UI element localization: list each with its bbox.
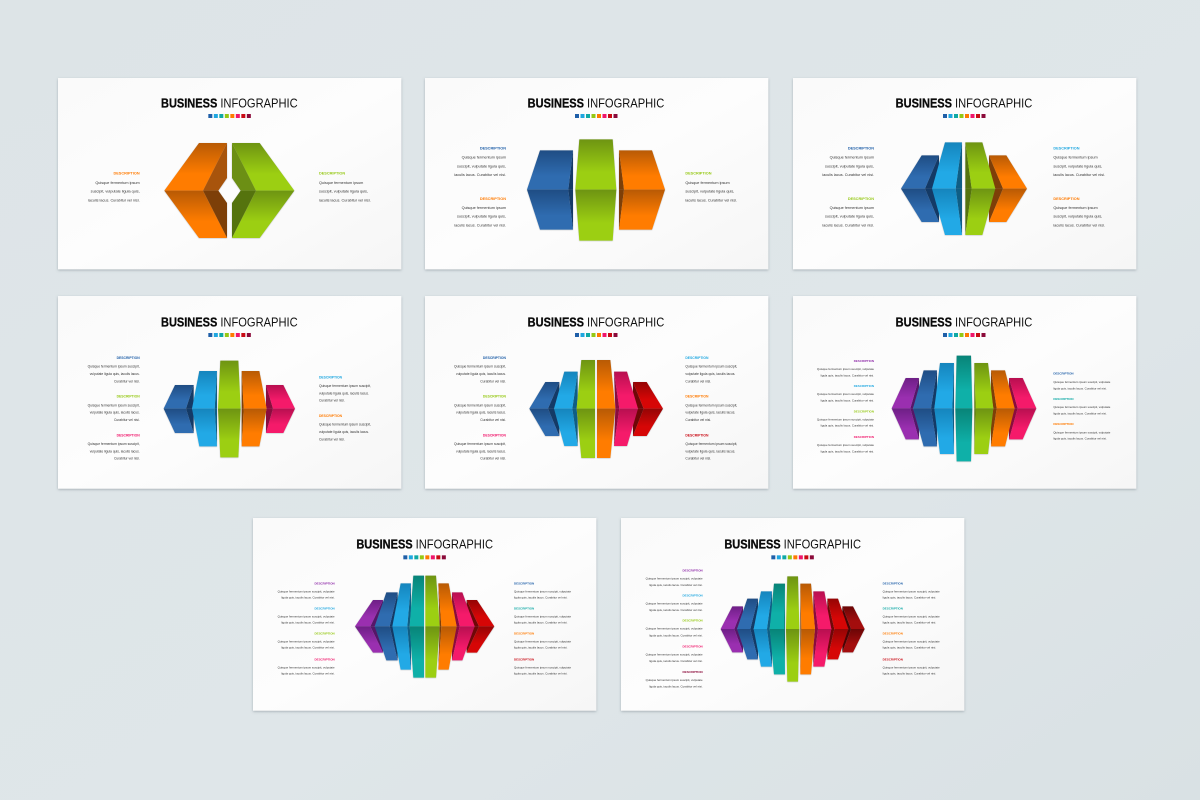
text: left description 2 xyxy=(454,197,506,227)
text: left description 4: Quisque fermentum ipsum suscipit, vulputate xyxy=(646,653,703,657)
text: left description 3: DESCRIPTION xyxy=(314,631,335,635)
text: left description 3: ligula quis, iaculis lacus. Curabitur vel nisi. xyxy=(821,424,874,428)
text: left description 2: Quisque fermentum ipsum suscipit, vulputate xyxy=(646,602,703,606)
text: right description 1: ligula quis, iaculis lacus. Curabitur vel nisi. xyxy=(1053,386,1107,390)
text: left description 1: iaculis lacus. Curabitur vel nisi. xyxy=(822,173,874,177)
text: left description 2: Quisque fermentum ipsum suscipit, xyxy=(454,403,506,407)
colour key squares xyxy=(575,333,617,337)
text: right description 2 xyxy=(514,606,571,625)
text: left description 2: vulputate ligula quis, iaculis lacus. xyxy=(90,411,140,415)
text: left description 2: iaculis lacus. Curabitur vel nisi. xyxy=(822,223,874,227)
title: INFOGRAPHIC xyxy=(220,97,298,111)
text: left description: suscipit, vulputate ligula quis, xyxy=(91,190,140,194)
text: left description 1 xyxy=(278,581,335,600)
text: left description 2 xyxy=(822,197,874,227)
text: left description 4: Quisque fermentum ipsum suscipit, vulputate xyxy=(817,443,874,447)
text: left description 2: DESCRIPTION xyxy=(483,395,507,399)
title: INFOGRAPHIC xyxy=(955,97,1032,111)
text: right description 2 xyxy=(1053,197,1105,227)
text: left description 3: vulputate ligula quis, iaculis lacus. xyxy=(456,449,506,453)
text: left description 3: Quisque fermentum ipsum suscipit, vulputate xyxy=(817,417,874,421)
text: right description 4 xyxy=(883,657,940,676)
text: left description 3: DESCRIPTION xyxy=(117,433,140,437)
text: right description 3: DESCRIPTION xyxy=(514,631,534,635)
text: left description 1: ligula quis, iaculis lacus. Curabitur vel nisi. xyxy=(821,373,874,377)
text: left description 4: Quisque fermentum ipsum suscipit, vulputate xyxy=(278,665,335,669)
title xyxy=(356,538,493,552)
text: right description: iaculis lacus. Curabitur vel nisi. xyxy=(319,198,371,202)
text: right description 3: ligula quis, iaculis lacus. Curabitur vel nisi. xyxy=(1053,436,1107,440)
text: right description: DESCRIPTION xyxy=(319,172,345,176)
text: right description 4: Quisque fermentum ipsum suscipit, vulputate xyxy=(514,665,571,669)
diagram: seven bars xyxy=(892,356,1036,461)
text: right description 1: Quisque fermentum ipsum suscipit, vulputate xyxy=(1053,380,1111,384)
text: right description 1 xyxy=(514,581,571,600)
text: right description 2: DESCRIPTION xyxy=(319,414,343,418)
text: left description 1: Quisque fermentum ipsum xyxy=(462,156,506,160)
text: right description 2: ligula quis, iaculis lacus. Curabitur vel nisi. xyxy=(883,621,936,625)
text: left description 3: DESCRIPTION xyxy=(682,619,703,623)
text: left description 4 xyxy=(817,435,874,453)
panel: seven-part infographic xyxy=(793,296,1136,489)
diagram: two folded chevrons xyxy=(164,143,294,238)
text: right description 1: DESCRIPTION xyxy=(883,581,903,585)
text: right description: Quisque fermentum ipsum xyxy=(319,181,363,185)
text: left description 2: suscipit, vulputate ligula quis, xyxy=(825,215,874,219)
text: left description 2: iaculis lacus. Curabitur vel nisi. xyxy=(454,223,506,227)
text: right description 1: DESCRIPTION xyxy=(1053,372,1074,376)
text: right description 1: DESCRIPTION xyxy=(685,356,709,360)
panel: eight-part infographic xyxy=(253,518,596,711)
text: left description 3: Curabitur vel nisi. xyxy=(114,457,140,461)
text: left description 1 xyxy=(822,147,874,177)
text: left description 3: vulputate ligula quis, iaculis lacus. xyxy=(90,449,140,453)
text: right description 1: Curabitur vel nisi. xyxy=(685,379,711,383)
text: left description 1 xyxy=(454,147,506,177)
panel: five-part infographic xyxy=(58,296,401,489)
text: left description 1: Quisque fermentum ipsum suscipit, xyxy=(454,365,506,369)
panel: three-part infographic xyxy=(425,78,768,269)
text: left description 1: Quisque fermentum ipsum suscipit, vulputate xyxy=(646,577,703,581)
text: right description 1: DESCRIPTION xyxy=(319,375,343,379)
text: right description: suscipit, vulputate ligula quis, xyxy=(685,190,734,194)
text: left description 3: ligula quis, iaculis lacus. Curabitur vel nisi. xyxy=(649,633,703,637)
text: left description 1: suscipit, vulputate ligula quis, xyxy=(825,164,874,168)
text: right description 1: ligula quis, iaculis lacus. Curabitur vel nisi. xyxy=(883,596,936,600)
diagram: eight bars xyxy=(355,576,494,678)
text: right description 1: Quisque fermentum ipsum suscipit, vulputate xyxy=(883,589,940,593)
text: left description 2: ligula quis, iaculis lacus. Curabitur vel nisi. xyxy=(649,608,703,612)
text: right description 2: Curabitur vel nisi. xyxy=(319,437,345,441)
text: right description 1: vulputate ligula quis, iaculis lacus. xyxy=(685,372,735,376)
text: left description 1: DESCRIPTION xyxy=(480,147,506,151)
text: right description 3: DESCRIPTION xyxy=(1053,422,1074,426)
panel: six-part infographic xyxy=(425,296,768,489)
text: left description 2: Curabitur vel nisi. xyxy=(114,418,140,422)
title: INFOGRAPHIC xyxy=(784,538,861,552)
text: left description 2: vulputate ligula quis, iaculis lacus. xyxy=(456,411,506,415)
text: left description 4: ligula quis, iaculis lacus. Curabitur vel nisi. xyxy=(649,659,703,663)
text: left description 2 xyxy=(817,384,874,402)
text: right description 3 xyxy=(685,433,737,461)
text: left description 2: Curabitur vel nisi. xyxy=(480,418,506,422)
text: right description 2: Quisque fermentum ipsum xyxy=(1053,206,1098,210)
text: left description 3: Curabitur vel nisi. xyxy=(480,457,506,461)
text: left description 3 xyxy=(817,409,874,428)
text: left description 2: DESCRIPTION xyxy=(854,384,874,388)
panel: nine-part infographic xyxy=(621,518,964,711)
text: left description 1 xyxy=(646,569,703,587)
text: left description 2: ligula quis, iaculis lacus. Curabitur vel nisi. xyxy=(281,621,335,625)
panel: four-part infographic xyxy=(793,78,1136,269)
text: left description 5: Quisque fermentum ipsum suscipit, vulputate xyxy=(646,678,703,682)
text: right description 1: iaculis lacus. Curabitur vel nisi. xyxy=(1053,173,1105,177)
text: right description 1: Curabitur vel nisi. xyxy=(319,399,345,403)
diagram: four bars xyxy=(901,142,1027,235)
text: right description 3 xyxy=(1053,422,1111,440)
text: left description 1: DESCRIPTION xyxy=(848,147,874,151)
text: right description 1: Quisque fermentum ipsum suscipit, vulputate xyxy=(514,589,571,593)
text: left description 1: vulputate ligula quis, iaculis lacus. xyxy=(90,372,140,376)
title: BUSINESS xyxy=(161,316,217,330)
text: right description 3: Quisque fermentum ipsum suscipit, vulputate xyxy=(883,639,940,643)
text: left description 3: Quisque fermentum ipsum suscipit, xyxy=(454,442,506,446)
text: left description 4: DESCRIPTION xyxy=(854,435,874,439)
text: left description 2: ligula quis, iaculis lacus. Curabitur vel nisi. xyxy=(821,398,874,402)
colour key squares xyxy=(208,114,251,118)
diagram: five bars xyxy=(164,361,295,457)
text: right description 2: Quisque fermentum ipsum suscipit, vulputate xyxy=(514,614,571,618)
text: left description 1: Quisque fermentum ipsum suscipit, xyxy=(88,365,140,369)
text: left description 1: Curabitur vel nisi. xyxy=(480,379,506,383)
text: left description 3 xyxy=(646,619,703,637)
title: INFOGRAPHIC xyxy=(587,316,664,330)
text: left description 2 xyxy=(646,594,703,612)
title: BUSINESS xyxy=(528,316,584,330)
text: right description 2: vulputate ligula quis, iaculis lacus. xyxy=(319,430,369,434)
text: left description 1: Curabitur vel nisi. xyxy=(114,379,140,383)
text: right description 4: Quisque fermentum ipsum suscipit, vulputate xyxy=(883,665,940,669)
text: right description 2: Quisque fermentum ipsum suscipit, vulputate xyxy=(1053,405,1111,409)
title: BUSINESS xyxy=(896,97,952,111)
text: left description 4: ligula quis, iaculis lacus. Curabitur vel nisi. xyxy=(821,449,874,453)
text: right description 2: DESCRIPTION xyxy=(883,606,903,610)
text: right description 1 xyxy=(1053,372,1111,390)
colour key squares xyxy=(403,555,446,559)
text: right description 2: DESCRIPTION xyxy=(514,606,534,610)
text: left description 2 xyxy=(454,395,507,422)
text: left description 2: suscipit, vulputate ligula quis, xyxy=(457,215,506,219)
title: BUSINESS xyxy=(896,316,952,330)
text: left description xyxy=(88,172,140,202)
title xyxy=(161,97,298,111)
title xyxy=(896,316,1032,330)
text: left description 1: DESCRIPTION xyxy=(314,581,335,585)
text: left description 1: DESCRIPTION xyxy=(682,569,703,573)
text: right description 1: Quisque fermentum ipsum xyxy=(1053,156,1098,160)
text: right description 4: ligula quis, iaculis lacus. Curabitur vel nisi. xyxy=(514,672,568,676)
text: right description 2: Quisque fermentum ipsum suscipit, xyxy=(319,423,371,427)
colour key squares xyxy=(208,333,251,337)
text: left description 4: DESCRIPTION xyxy=(314,657,335,661)
text: right description 4: DESCRIPTION xyxy=(514,657,534,661)
text: right description 2: Quisque fermentum ipsum suscipit, vulputate xyxy=(883,614,940,618)
colour key squares xyxy=(575,114,617,118)
text: left description 2: Quisque fermentum ipsum suscipit, vulputate xyxy=(278,614,335,618)
colour key squares xyxy=(771,555,814,559)
text: left description 1 xyxy=(88,356,140,383)
text: right description 1 xyxy=(685,356,737,383)
text: left description 5 xyxy=(646,670,703,688)
colour key squares xyxy=(943,114,985,118)
text: left description 1: Quisque fermentum ipsum suscipit, vulputate xyxy=(817,367,874,371)
text: right description 1: vulputate ligula quis, iaculis lacus. xyxy=(319,391,369,395)
text: right description 1: suscipit, vulputate ligula quis, xyxy=(1053,164,1102,168)
title: BUSINESS xyxy=(356,538,413,552)
title: INFOGRAPHIC xyxy=(587,97,664,111)
text: left description 2 xyxy=(88,395,140,422)
text: right description 2 xyxy=(883,606,940,625)
text: right description xyxy=(319,172,371,202)
text: right description 2: suscipit, vulputate ligula quis, xyxy=(1053,215,1102,219)
text: right description 2 xyxy=(1053,397,1111,415)
text: left description 1: suscipit, vulputate ligula quis, xyxy=(457,164,506,168)
text: left description: iaculis lacus. Curabitur vel nisi. xyxy=(88,198,140,202)
text: left description 4 xyxy=(646,645,703,663)
text: right description 3: Quisque fermentum ipsum suscipit, vulputate xyxy=(1053,430,1111,434)
text: left description 1: ligula quis, iaculis lacus. Curabitur vel nisi. xyxy=(649,583,703,587)
text: right description 2: iaculis lacus. Curabitur vel nisi. xyxy=(1053,223,1105,227)
text: left description 3 xyxy=(454,433,507,461)
text: left description 3: Quisque fermentum ipsum suscipit, vulputate xyxy=(646,627,703,631)
text: right description 3 xyxy=(514,631,571,650)
text: right description 4 xyxy=(514,657,571,676)
text: left description 1: Quisque fermentum ipsum xyxy=(830,156,874,160)
text: right description 1: DESCRIPTION xyxy=(514,581,534,585)
text: left description 1: DESCRIPTION xyxy=(483,356,507,360)
text: left description 2: DESCRIPTION xyxy=(682,594,703,598)
title: BUSINESS xyxy=(528,97,584,111)
text: left description 2: Quisque fermentum ipsum suscipit, vulputate xyxy=(817,392,874,396)
text: right description 2 xyxy=(685,395,737,422)
text: right description 3: ligula quis, iaculis lacus. Curabitur vel nisi. xyxy=(514,646,568,650)
text: right description 2: DESCRIPTION xyxy=(1053,197,1080,201)
diagram: six bars xyxy=(529,360,663,458)
text: right description 3: DESCRIPTION xyxy=(883,631,903,635)
text: left description 2: DESCRIPTION xyxy=(848,197,874,201)
title: INFOGRAPHIC xyxy=(955,316,1032,330)
text: left description 1: ligula quis, iaculis lacus. Curabitur vel nisi. xyxy=(281,596,335,600)
text: right description 1 xyxy=(1053,147,1105,177)
text: left description 1: Quisque fermentum ipsum suscipit, vulputate xyxy=(278,589,335,593)
text: right description 4: ligula quis, iaculis lacus. Curabitur vel nisi. xyxy=(883,672,936,676)
text: left description 3 xyxy=(88,433,140,461)
title xyxy=(528,97,664,111)
title xyxy=(528,316,664,330)
title xyxy=(161,316,298,330)
text: left description 2: Quisque fermentum ipsum xyxy=(830,206,874,210)
text: right description: suscipit, vulputate ligula quis, xyxy=(319,190,368,194)
text: right description: DESCRIPTION xyxy=(685,172,712,176)
text: right description 3 xyxy=(883,631,940,650)
text: left description 5: ligula quis, iaculis lacus. Curabitur vel nisi. xyxy=(649,684,703,688)
title: BUSINESS xyxy=(724,538,781,552)
text: right description 1 xyxy=(319,375,371,403)
text: right description 1 xyxy=(883,581,940,600)
title: INFOGRAPHIC xyxy=(416,538,493,552)
text: right description: Quisque fermentum ipsum xyxy=(685,181,730,185)
title: INFOGRAPHIC xyxy=(220,316,298,330)
text: right description 3: DESCRIPTION xyxy=(685,433,709,437)
text: left description 1: DESCRIPTION xyxy=(854,359,874,363)
text: right description 1: ligula quis, iaculis lacus. Curabitur vel nisi. xyxy=(514,596,568,600)
text: right description: iaculis lacus. Curabitur vel nisi. xyxy=(685,198,737,202)
text: right description 2: Curabitur vel nisi. xyxy=(685,418,711,422)
text: right description 1: Quisque fermentum ipsum suscipit, xyxy=(685,365,737,369)
text: left description 3: DESCRIPTION xyxy=(483,433,507,437)
text: right description 2: DESCRIPTION xyxy=(1053,397,1074,401)
colour key squares xyxy=(943,333,985,337)
text: right description 3: Curabitur vel nisi. xyxy=(685,457,711,461)
text: left description 3: Quisque fermentum ipsum suscipit, vulputate xyxy=(278,639,335,643)
text: right description 2: ligula quis, iaculis lacus. Curabitur vel nisi. xyxy=(1053,411,1107,415)
text: left description 3: DESCRIPTION xyxy=(854,409,874,413)
text: left description 4 xyxy=(278,657,335,676)
text: left description 1: vulputate ligula quis, iaculis lacus. xyxy=(456,372,506,376)
text: left description 1 xyxy=(454,356,507,383)
text: left description 4: DESCRIPTION xyxy=(682,645,703,649)
text: left description 2: DESCRIPTION xyxy=(314,606,335,610)
text: left description 4: ligula quis, iaculis lacus. Curabitur vel nisi. xyxy=(281,672,335,676)
text: right description 3: Quisque fermentum ipsum suscipit, xyxy=(685,442,737,446)
text: right description 3: vulputate ligula quis, iaculis lacus. xyxy=(685,449,735,453)
diagram: three bars xyxy=(527,139,665,241)
text: right description xyxy=(685,172,737,202)
text: left description 1: iaculis lacus. Curabitur vel nisi. xyxy=(454,173,506,177)
text: left description 3: ligula quis, iaculis lacus. Curabitur vel nisi. xyxy=(281,646,335,650)
text: left description: DESCRIPTION xyxy=(113,172,140,176)
text: right description 2: Quisque fermentum ipsum suscipit, xyxy=(685,403,737,407)
text: left description 2: DESCRIPTION xyxy=(117,395,140,399)
text: right description 2 xyxy=(319,414,371,441)
text: left description 2: Quisque fermentum ipsum xyxy=(462,206,506,210)
text: left description 3 xyxy=(278,631,335,650)
text: left description: Quisque fermentum ipsum xyxy=(95,181,140,185)
text: left description 1 xyxy=(817,359,874,377)
text: right description 2: ligula quis, iaculis lacus. Curabitur vel nisi. xyxy=(514,621,568,625)
title xyxy=(896,97,1032,111)
text: right description 2: DESCRIPTION xyxy=(685,395,709,399)
text: left description 3: Quisque fermentum ipsum suscipit, xyxy=(88,442,140,446)
text: left description 1: DESCRIPTION xyxy=(117,356,140,360)
text: left description 2 xyxy=(278,606,335,625)
text: right description 1: DESCRIPTION xyxy=(1053,147,1080,151)
text: right description 3: ligula quis, iaculis lacus. Curabitur vel nisi. xyxy=(883,646,936,650)
diagram: nine bars xyxy=(721,576,865,682)
text: right description 2: vulputate ligula quis, iaculis lacus. xyxy=(685,411,735,415)
panel: two-part infographic xyxy=(58,78,401,269)
text: right description 4: DESCRIPTION xyxy=(883,657,903,661)
title: BUSINESS xyxy=(161,97,217,111)
title xyxy=(724,538,861,552)
text: left description 5: DESCRIPTION xyxy=(682,670,703,674)
text: left description 2: DESCRIPTION xyxy=(480,197,506,201)
text: right description 1: Quisque fermentum ipsum suscipit, xyxy=(319,384,371,388)
text: right description 3: Quisque fermentum ipsum suscipit, vulputate xyxy=(514,639,571,643)
text: left description 2: Quisque fermentum ipsum suscipit, xyxy=(88,403,140,407)
